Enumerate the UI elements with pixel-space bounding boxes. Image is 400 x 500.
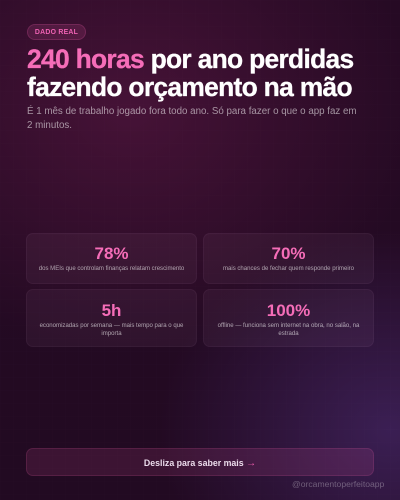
stat card: 70%: [203, 233, 374, 284]
badge: dado real: [27, 24, 86, 40]
stat card: 78%: [26, 233, 197, 284]
stat card: 100%: offline — funciona sem internet na obra, no salão, na: [218, 323, 359, 329]
stat card: 70%: 70%: [271, 244, 306, 263]
stat card: 100%: estrada: [278, 331, 299, 337]
stat card: 100%: 100%: [267, 301, 310, 320]
panel: stats grid: [26, 233, 374, 347]
title: fazendo orçamento na mão: [27, 72, 352, 102]
subtitle text: É 1 mês de trabalho jogado fora todo ano. Só para fazer o que o app faz em: [27, 106, 357, 117]
badge: dado real: DADO REAL: [35, 29, 78, 36]
stat card: 5h: [26, 289, 197, 347]
call to action: Desliza para saber mais →: [144, 458, 256, 469]
title: 240 horas por ano perdidas: [27, 44, 353, 74]
handle: @orcamentoperfeitoapp: [292, 479, 384, 489]
stat card: 78%: 78%: [94, 244, 129, 263]
stat card: 70%: mais chances de fechar quem responde primeiro: [223, 266, 354, 272]
call to action: [26, 448, 374, 476]
subtitle text: [27, 105, 357, 131]
subtitle text: 2 minutos.: [27, 120, 72, 131]
title: [27, 44, 354, 102]
stat card: 5h: economizadas por semana — mais tempo para o que: [40, 323, 183, 329]
stat card: 100%: [203, 289, 374, 347]
stat card: 78%: dos MEIs que controlam finanças relatam crescimento: [39, 266, 184, 272]
stat card: 5h: importa: [101, 331, 122, 337]
stat card: 5h: 5h: [102, 301, 121, 320]
